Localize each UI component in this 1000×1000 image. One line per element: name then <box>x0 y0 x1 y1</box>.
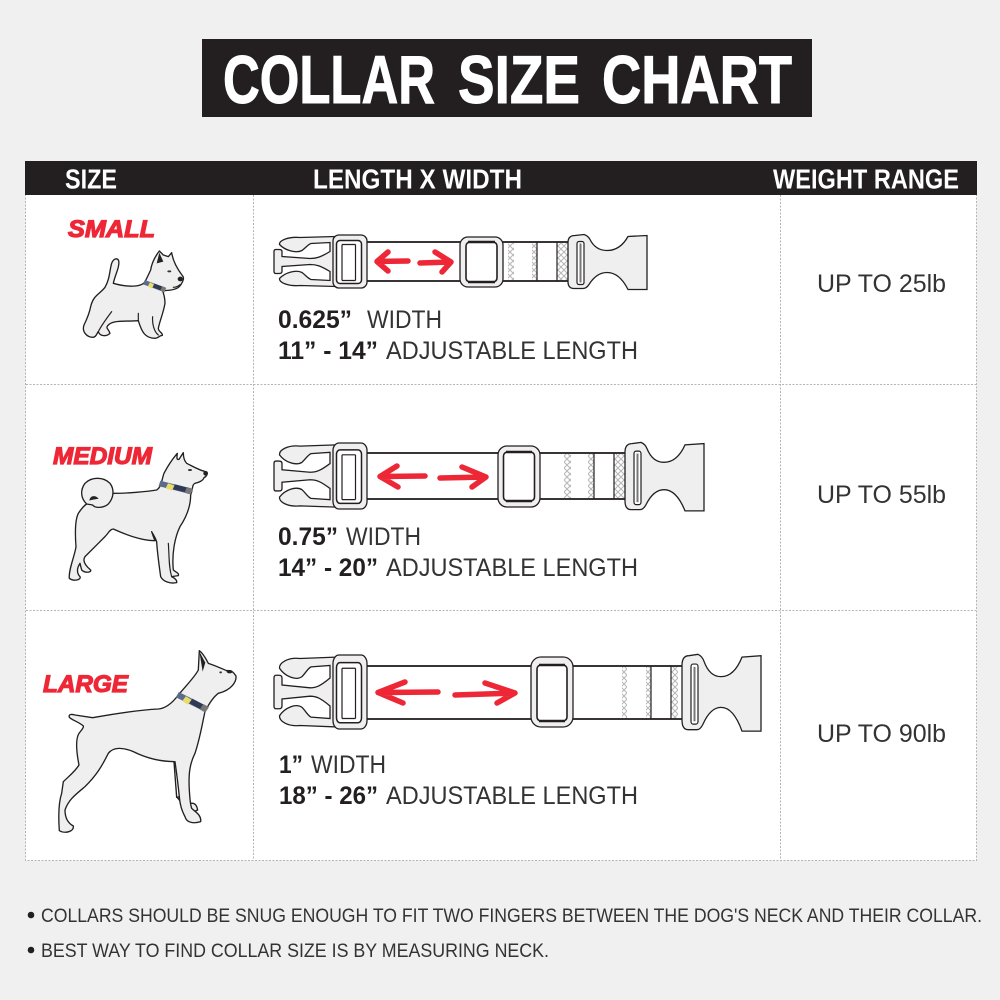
arrows: medium <box>380 466 486 487</box>
label: medium: MEDIUM <box>53 443 153 470</box>
text: small dimensions: 11” - 14” <box>278 337 378 365</box>
text: medium dimensions: 0.75” <box>278 523 338 551</box>
text: medium dimensions: ADJUSTABLE LENGTH <box>386 554 638 582</box>
row: large <box>43 651 946 832</box>
text: medium dimensions <box>278 523 638 582</box>
text: large dimensions <box>279 751 638 810</box>
arrows: large <box>378 682 515 703</box>
weight: medium: UP TO 55lb <box>817 481 946 509</box>
title <box>202 39 812 118</box>
footnotes <box>28 906 982 962</box>
icon: large dog <box>59 651 236 832</box>
collar diagram: small <box>274 234 647 290</box>
footnotes: BEST WAY TO FIND COLLAR SIZE IS BY MEASURING NECK. <box>41 941 549 962</box>
table header row: SIZE <box>65 164 117 194</box>
weight: large: UP TO 90lb <box>817 720 946 748</box>
arrows: small <box>377 252 451 272</box>
collar diagram: large <box>274 654 761 731</box>
text: small dimensions <box>278 306 638 365</box>
title: CHART <box>602 42 792 118</box>
table header row: WEIGHT RANGE <box>773 164 959 194</box>
text: large dimensions: 1” <box>279 751 303 779</box>
text: small dimensions: WIDTH <box>367 306 442 334</box>
row: medium <box>53 442 946 583</box>
table header row <box>25 161 977 195</box>
text: medium dimensions: WIDTH <box>346 523 421 551</box>
title: SIZE <box>458 42 580 118</box>
text: medium dimensions: 14” - 20” <box>278 554 378 582</box>
icon: small dog <box>83 251 183 338</box>
icon: medium dog <box>69 453 208 583</box>
weight: small: UP TO 25lb <box>817 270 946 298</box>
size table panel <box>26 162 976 860</box>
text: small dimensions: 0.625” <box>278 306 352 334</box>
collar diagram: medium <box>274 442 704 511</box>
label: large: LARGE <box>43 671 129 698</box>
label: small: SMALL <box>68 216 155 243</box>
row: small <box>68 216 946 365</box>
text: large dimensions: 18” - 26” <box>279 782 378 810</box>
text: large dimensions: ADJUSTABLE LENGTH <box>386 782 638 810</box>
table header row: LENGTH X WIDTH <box>313 164 522 194</box>
title: COLLAR <box>223 42 435 118</box>
text: large dimensions: WIDTH <box>311 751 386 779</box>
text: small dimensions: ADJUSTABLE LENGTH <box>386 337 638 365</box>
